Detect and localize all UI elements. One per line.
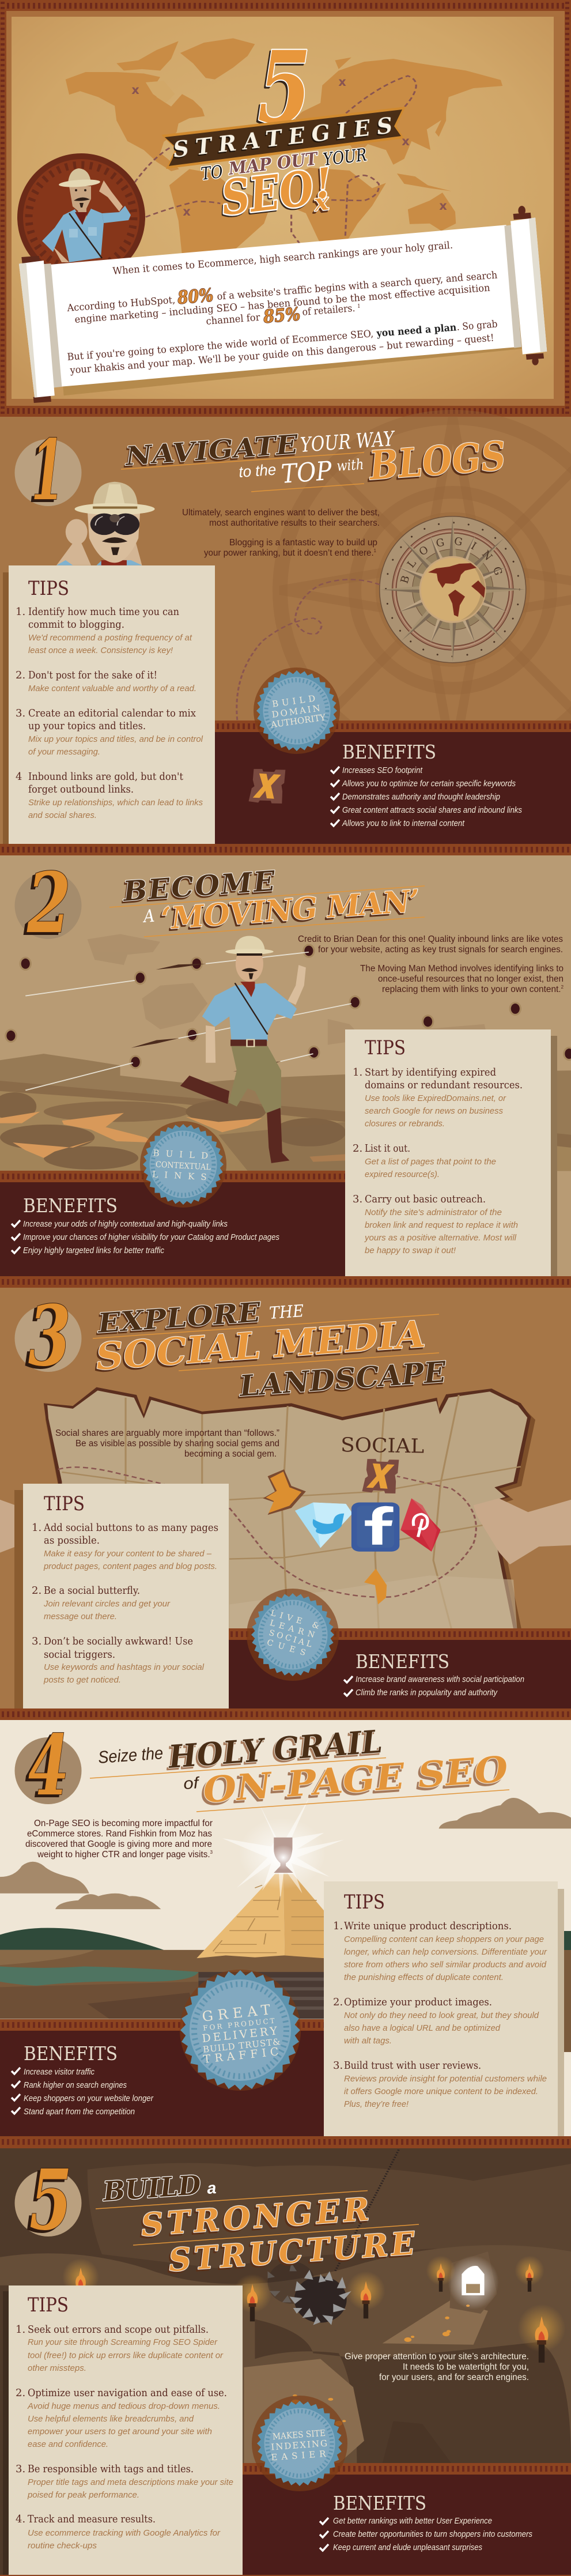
map x marks: x [439,199,447,213]
tip 1 [16,2324,224,2373]
tip 1: Seek out errors and scope out pitfalls. [28,2324,209,2336]
tip 3: Use keywords and hashtags in your social [44,1662,205,1672]
tip 3: 3. [16,707,25,719]
badge: live and learn social cues: CUES [266,1638,312,1659]
tip 1: 1. [16,2324,25,2336]
tip 2: Optimize your product images. [344,1996,492,2008]
tips heading: TIPS [44,1492,85,1515]
intro text: Social shares are arguably more important than “follows.” [55,1428,279,1438]
strategies ribbon: STRATEGIES [172,112,394,163]
tip 2: 2. [16,669,25,681]
map x marks: x [183,205,191,218]
intro paragraph 3: you need a plan [376,322,457,340]
tip 3: Build trust with user reviews. [344,2060,481,2072]
social gems [0,1498,571,1564]
intro paragraph 2: 80% [176,285,214,308]
tip 3: Plus, they’re free! [344,2099,409,2109]
benefits band [229,1628,571,1708]
map label: social: SOCIAL [341,1434,425,1458]
gold coins [292,2305,470,2426]
intro paragraph 2: of a website's traffic begins with a search query, and search [217,270,498,303]
parchment map [12,17,554,399]
intro paragraph 2: 85% [262,304,301,327]
tip 3 [16,2463,233,2500]
badge: live and learn social cues: SOCIAL [268,1628,315,1650]
badge: makes site indexing easier: INDEXING [271,2438,329,2452]
map x marks [131,75,447,218]
badge: build contextual links: BUILD [153,1148,215,1161]
benefits list 5: Keep current and elude unpleasant surprises [333,2543,482,2552]
heading: NAVIGATE [123,429,300,472]
folded shade [229,1575,517,1630]
map x marks: x [131,83,139,97]
tip 1: closures or rebrands. [365,1119,445,1129]
tip 4: and social shares. [28,810,97,820]
distant hills [0,1928,164,1950]
scroll with intro text [19,206,547,403]
benefits list 5 [320,2492,532,2552]
tip 1 [16,606,192,655]
river [0,1967,198,1986]
heading: STRONGER [139,2190,370,2243]
tip 4: 4. [16,2513,25,2525]
intro text: 1 [374,548,377,553]
heading: Seize the [97,1744,164,1767]
tip 2: Avoid huge menus and tedious drop-down menus. [27,2401,220,2411]
badge: makes site indexing easier: MAKES SITE [272,2428,326,2442]
explorer figure [42,168,131,262]
intro text [182,508,380,558]
map compass arrows [263,1469,387,1605]
tip 1: store from others who sell similar products and avoid [344,1960,547,1970]
intro text: once-useful resources that no longer exist, then [378,974,564,984]
x marks the spot [362,1455,400,1496]
benefits list 3: Increase brand awareness with social participation [356,1674,524,1684]
heading: ON-PAGE SEO [202,1748,509,1811]
benefits band [0,2019,324,2136]
tip 1: Add social buttons to as many pages [43,1522,218,1534]
intro text: weight to higher CTR and longer page visits. [37,1850,213,1860]
intro paragraph 1: When it comes to Ecommerce, high search rankings are your holy grail. [112,240,453,277]
torches [62,2256,566,2363]
section 2: moving man [0,854,571,1288]
heading [121,428,508,492]
tip 1: product pages, content pages and blog posts. [43,1562,217,1571]
tip 1: the punishing effects of duplicate content. [344,1972,504,1982]
number 3 badge: 3 [28,1287,71,1385]
compass: blogging: BLOGGING [400,537,502,583]
tip 3: social triggers. [44,1649,115,1661]
intro paragraph 2: 1 [357,304,361,310]
tip 2: Use helpful elements like breadcrumbs, and [28,2414,194,2424]
tip 2 [16,669,196,693]
tip 1: longer, which can help conversions. Differentiate your [344,1947,547,1957]
panel: tips 4 [324,1881,571,2136]
tip 3: up your topics and titles. [28,720,146,732]
intro text: for your users, and for search engines. [379,2373,529,2382]
section 1: blogs [0,410,571,855]
benefits band [0,1171,345,1276]
benefits list 5: Get better rankings with better User Experience [333,2516,492,2526]
tip 2: Optimize user navigation and ease of use. [28,2387,227,2399]
hands [0,1498,571,1564]
tip 2 [333,1996,539,2046]
tip 1: 1. [32,1522,41,1534]
number 5 badge: 5 [29,2151,72,2249]
heading: BUILD [101,2169,202,2207]
tip 3: 3. [353,1193,362,1205]
intro text: Be as visible as possible by sharing social gems and [75,1439,279,1449]
section 4: on-page seo [0,1717,571,2148]
tip 3: Don’t be socially awkward! Use [44,1635,193,1647]
holy grail glow [222,1797,344,1900]
section 3: social media [0,1287,571,1720]
tip 3: 3. [32,1635,41,1647]
title: 5 Strategies to map out your SEO: YOUR [322,145,368,170]
tip 2: with alt tags. [344,2036,392,2046]
tip 4: Use ecommerce tracking with Google Analytics for [28,2528,221,2538]
tip 3: Carry out basic outreach. [365,1193,486,1205]
benefits list 3: Climb the ranks in popularity and authority [356,1688,498,1698]
badge: live and learn social cues: LEARN [269,1619,320,1641]
spiked wrecking ball [268,2261,351,2325]
intro text: eCommerce stores. Rand Fishkin from Moz has [27,1829,212,1839]
panel: tips 3 [14,1484,229,1708]
intro paragraph 2: According to HubSpot, [66,295,176,314]
tip 3: Notify the site's administrator of the [365,1208,502,1217]
benefits list 1: Allows you to optimize for certain specific keywords [342,779,516,789]
tip 1: tool (free!) to pick up errors like duplicate content or [28,2351,224,2360]
tips heading: TIPS [344,1891,385,1914]
benefits list 4 [12,2042,154,2117]
title: 5 Strategies to map out your SEO: MAP OUT [227,149,320,179]
wrecking ball chain [335,2149,399,2271]
tips heading: TIPS [28,577,69,600]
tip 2: empower your users to get around your site with [28,2427,212,2437]
tip 4 [16,2513,221,2551]
title: 5 Strategies to map out your SEO: ! [312,158,335,209]
intro text: Credit to Brian Dean for this one! Quality inbound links are like votes [298,934,563,944]
tip 1: 1. [16,606,25,618]
number 1 badge [15,421,82,519]
tip 2: Join relevant circles and get your [43,1599,171,1609]
tip 4: 4 [16,771,22,783]
benefits list 4: Stand apart from the competition [24,2107,135,2117]
benefits band [215,721,571,844]
landscape with pyramid [0,1797,571,2019]
tip 1: as possible. [44,1534,100,1547]
benefits list 5: BENEFITS [333,2492,426,2514]
heading [90,1723,509,1812]
benefits list 1 [331,741,522,828]
clouds [0,1798,571,1909]
intro text: Give proper attention to your site’s architecture. [345,2352,529,2362]
tip 1: domains or redundant resources. [365,1079,523,1091]
tip 2 [353,1142,496,1179]
darts and holes [5,944,571,1090]
tip 1: Use tools like ExpiredDomains.net, or [365,1093,506,1103]
badge: great for product delivery: GREAT [201,2001,275,2025]
tip 2: Be a social butterfly. [44,1585,140,1597]
badge: makes site indexing easier: EASIER [271,2448,330,2462]
benefits list 1: Demonstrates authority and thought leadership [342,792,500,802]
badge: great for product delivery: BUILD TRUST& [202,2036,281,2055]
number 2 badge: 2 [27,854,71,952]
big five: 5 [258,29,311,146]
tip 3: 3. [333,2060,343,2072]
intro text: It needs to be watertight for you, [403,2362,529,2372]
icon: pinterest gem [400,1498,441,1552]
tip 3 [16,707,203,757]
intro paragraph 3: But if you're going to explore the wide world of Ecommerce SEO, [67,328,374,363]
tips heading: TIPS [28,2294,69,2317]
tip 3: it offers Google more unique content to be indexed. [344,2087,538,2096]
benefits list 2: BENEFITS [23,1194,118,1217]
tip 2: Get a list of pages that point to the [365,1157,496,1167]
cave door with treasure [448,2256,499,2309]
benefits list 1: Great content attracts social shares and inbound links [342,805,522,815]
tip 2: 2. [333,1996,343,2008]
tip 2: ease and confidence. [28,2439,108,2449]
benefits list 2: Enjoy highly targeted links for better traffic [23,1246,164,1255]
intro text: becoming a social gem. [184,1449,277,1459]
intro paragraph 3: . So grab [456,319,498,333]
tip 2: 2. [16,2387,25,2399]
tip 3: broken link and request to replace it with [365,1220,518,1230]
heading: STRUCTURE [167,2224,417,2279]
intro text: 2 [561,985,564,990]
benefits list 1: BENEFITS [342,741,436,763]
section 5: stronger structure [0,2148,571,2576]
panel: tips 5 [3,2285,243,2575]
tip 3: Be responsible with tags and titles. [28,2463,194,2475]
title: 5 Strategies to map out your SEO: TO [200,162,224,184]
heading [96,2169,419,2279]
intro text: Ultimately, search engines want to deliver the best, [182,508,380,518]
intro text: 3 [210,1850,213,1855]
cave rock layers [0,2149,571,2464]
intro paragraph 3: your khakis and your map. We'll be your guide on this dangerous – but rewarding – quest! [69,332,494,376]
benefits list 4: Rank higher on search engines [24,2080,127,2090]
tip 3: Mix up your topics and titles, and be in control [28,734,203,744]
heading: EXPLORE [96,1296,262,1340]
treasure route dashes [135,76,416,247]
tip 1: other missteps. [28,2363,86,2373]
intro text: replacing them with links to your own content. [382,985,562,994]
intro text [298,934,564,994]
tip 1: Run your site through Screaming Frog SEO Spider [28,2337,218,2347]
tip 2: 2. [353,1142,362,1155]
benefits list 4: Keep shoppers on your website longer [24,2094,154,2103]
benefits list 2: Improve your chances of higher visibility for your Catalog and Product pages [23,1232,279,1242]
heading: THE [269,1301,304,1323]
tip 1: We'd recommend a posting frequency of at [28,633,192,643]
heading: ‘MOVING MAN’ [160,884,421,937]
badge: great for product delivery: DELIVERY [202,2024,280,2045]
badge: live and learn social cues [247,1589,339,1681]
tip 3 [353,1193,518,1255]
tip 4: Strike up relationships, which can lead to links [28,798,203,808]
intro text [55,1428,279,1459]
tip 3: of your messaging. [28,747,100,757]
benefits list 4: BENEFITS [24,2042,118,2065]
tip 2: message out there. [44,1612,117,1621]
tip 2 [16,2387,227,2449]
map x marks: x [402,134,410,148]
badge: great for product delivery [180,1970,301,2091]
heading [109,865,425,937]
tip 1: commit to blogging. [28,618,124,631]
tip 3: yours as a positive alternative. Most will [364,1233,517,1243]
tip 1 [333,1920,547,1982]
icon: facebook gem [351,1503,399,1552]
benefits list 4: Increase visitor traffic [24,2067,94,2077]
tip 4: Track and measure results. [28,2513,156,2525]
title: 5 Strategies to map out your SEO [161,29,406,227]
tip 1: Write unique product descriptions. [344,1920,512,1932]
badge: great for product delivery: FOR PRODUCT [203,2016,277,2032]
landscape backdrop [0,934,571,1171]
tip 3: poised for peak performance. [27,2490,139,2500]
tip 3 [333,2060,547,2109]
heading: HOLY GRAIL [166,1723,384,1775]
badge: build contextual links: CONTEXTUAL [155,1160,211,1172]
tip 2: expired resource(s). [365,1170,440,1179]
intro text [25,1819,213,1860]
route to x [237,579,380,768]
tip 1 [353,1066,523,1129]
compass: blogging [379,516,527,663]
heading: of [183,1774,201,1793]
sandy trail [383,2299,488,2345]
heading: YOUR WAY [300,428,396,457]
intro text: discovered that Google is giving more and more [25,1839,212,1849]
title: 5 Strategies to map out your SEO: SEO [218,161,316,227]
badge: build contextual links [140,1121,226,1208]
panel: tips 1 [3,565,215,844]
badge: great for product delivery: TRAFFIC [203,2045,283,2066]
tip 1: search Google for news on business [365,1106,503,1116]
world map continents [66,38,502,256]
heading: to the [238,461,277,481]
tip 4: forget outbound links. [28,783,134,795]
heading [93,1296,448,1403]
badge: build contextual links: LINKS [152,1169,213,1183]
intro text: for your website, acting as key trust signals for search engines. [318,945,563,955]
heading: BECOME [121,865,277,908]
heading: A [141,906,156,927]
tip 1: 1. [353,1066,362,1078]
tip 4: Inbound links are gold, but don't [28,771,184,783]
intro text: On-Page SEO is becoming more impactful for [34,1819,213,1828]
icon: twitter gem [295,1503,353,1548]
tip 3: Proper title tags and meta descriptions make your site [28,2477,233,2487]
benefits band [243,2463,571,2575]
tip 2: List it out. [365,1142,410,1155]
heading: with [336,456,364,474]
tips heading: TIPS [365,1036,406,1059]
intro text: The Moving Man Method involves identifying links to [360,964,564,974]
running explorer [180,936,306,1163]
tip 3: 3. [16,2463,25,2475]
heading: BLOGS [367,433,508,489]
title: 5 Strategies to map out your SEO: x [312,188,331,217]
tip 3 [32,1635,205,1685]
badge: build domain authority: BUILD [271,693,319,710]
tip 3: be happy to swap it out! [365,1246,456,1255]
benefits list 2 [12,1194,279,1255]
light Hudson bay inlet [146,81,175,103]
benefits list 1: Allows you to link to internal content [342,819,465,828]
tip 4: routine check-ups [28,2541,97,2551]
panel: tips 2 [345,1029,557,1276]
benefits list 1: Increases SEO footprint [342,765,423,775]
tip 2: 2. [32,1585,41,1597]
intro text [345,2352,529,2382]
badge: build domain authority: AUTHORITY [270,712,327,730]
badge: build domain authority: DOMAIN [271,703,323,720]
tip 2: Not only do they need to look great, but they should [344,2011,539,2020]
heading: LANDSCAPE [237,1355,448,1403]
intro text: most authoritative results to their searchers. [209,518,380,528]
tip 1: Compelling content can keep shoppers on your page [344,1934,544,1944]
intro paragraph 2: of retailers. [302,303,356,318]
tip 1: Start by identifying expired [365,1066,496,1078]
x marks the spot [249,765,286,806]
tip 1: least once a week. Consistency is key! [28,646,173,655]
intro paragraph 2: channel for [206,312,261,327]
tip 1: 1. [333,1920,343,1932]
tip 2: Make content valuable and worthy of a read. [28,684,196,693]
benefits list 2: Increase your odds of highly contextual and high-quality links [23,1219,228,1229]
pyramid [196,1874,364,1964]
tip 2: also have a logical URL and be optimized [344,2023,501,2033]
explorer medallion [17,153,145,281]
tip 3: Create an editorial calendar to mix [28,707,196,719]
tip 2: Don't post for the sake of it! [28,669,157,681]
tip 1: Identify how much time you can [28,606,179,618]
badge: build domain authority [254,667,340,754]
explorer with binoculars [56,482,155,565]
map x marks: x [338,75,346,89]
hero section [0,0,571,417]
benefits list 3 [344,1650,524,1698]
tip 4 [16,771,203,820]
tip 3: Reviews provide insight for potential customers while [344,2074,547,2084]
badge: makes site indexing easier [252,2396,347,2491]
badge: live and learn social cues: LIVE & [270,1608,324,1632]
treasure map [44,1387,535,1630]
heading: TOP [280,455,333,489]
tip 1 [32,1522,218,1571]
tip 2 [32,1585,171,1621]
intro paragraph 2: engine marketing – including SEO – has been found to be the most effective acquisition [74,282,490,326]
number 1 badge: 1 [31,421,65,519]
heading: a [206,2179,217,2197]
number 4 badge: 4 [28,1717,69,1814]
intro text: Blogging is a fantastic way to build up [229,538,377,548]
tip 3: posts to get noticed. [43,1675,121,1685]
tip 1: Make it easy for your content to be shared – [44,1549,212,1559]
benefits list 3: BENEFITS [356,1650,449,1673]
heading: SOCIAL MEDIA [94,1312,427,1379]
intro text: your power ranking, but it doesn’t end there. [204,548,378,558]
faint background compass [280,417,571,763]
benefits list 5: Create better opportunities to turn shoppers into customers [333,2529,532,2539]
